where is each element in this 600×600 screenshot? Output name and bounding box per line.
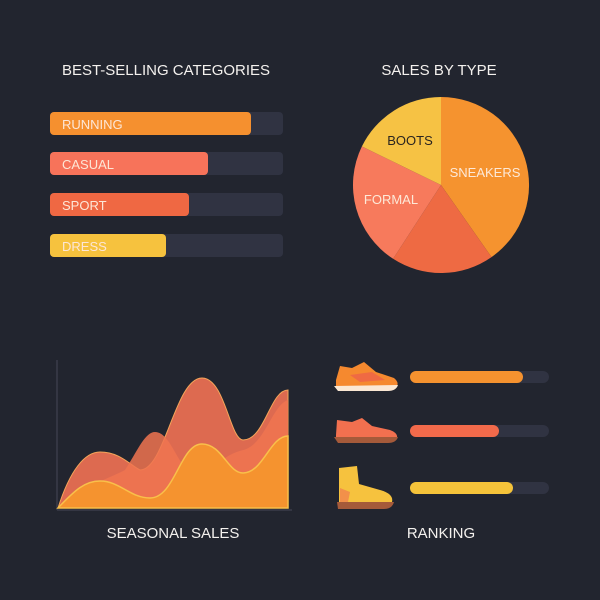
icon: loafer (334, 418, 398, 443)
bar: sport: SPORT (62, 198, 107, 213)
icon: sneaker (334, 362, 398, 391)
bar: dress: DRESS (62, 239, 107, 254)
title: seasonal sales: SEASONAL SALES (107, 525, 239, 542)
pie chart: FORMAL (364, 192, 418, 207)
icon: boot (337, 466, 394, 509)
pie chart: BOOTS (387, 133, 433, 148)
title: ranking: RANKING (407, 525, 475, 542)
bar: casual: CASUAL (62, 157, 114, 172)
pie chart: SNEAKERS (450, 165, 521, 180)
bar: sport (50, 193, 283, 216)
bar: dress (50, 234, 283, 257)
bar: casual (50, 152, 283, 175)
title: best-selling categories: BEST-SELLING CATEGORIES (62, 62, 270, 79)
bar: running (50, 112, 283, 135)
bar: running: RUNNING (62, 117, 123, 132)
title: sales by type: SALES BY TYPE (381, 62, 497, 79)
